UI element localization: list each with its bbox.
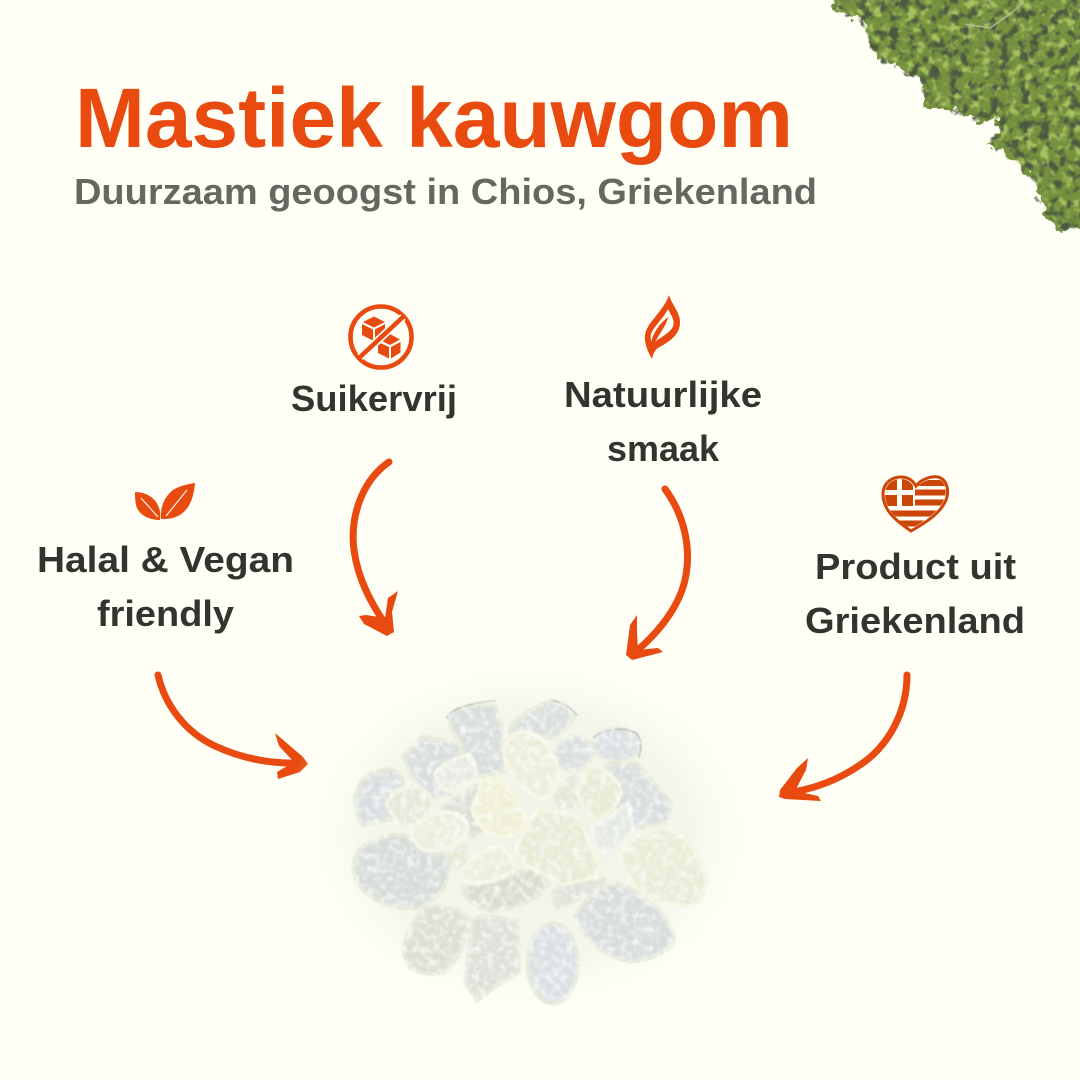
arrow: Griekenland to gum	[779, 675, 907, 801]
label: Halal & Vegan	[37, 539, 294, 580]
feature: Suikervrij	[291, 306, 457, 419]
arrow: Natuurlijke smaak to gum	[626, 489, 688, 660]
subtitle: Duurzaam geoogst in Chios, Griekenland	[74, 171, 817, 212]
icon: flame leaf	[645, 295, 680, 359]
feature: Product uit Griekenland	[805, 477, 1025, 641]
icon: Greek flag heart	[883, 477, 948, 531]
label: Suikervrij	[291, 378, 457, 419]
title: Mastiek kauwgom	[75, 71, 793, 165]
label: Product uit	[815, 546, 1016, 587]
arrow: Suikervrij to gum	[353, 462, 398, 636]
mastic gum pieces	[354, 700, 706, 1003]
feature: Halal & Vegan	[37, 483, 294, 634]
icon: two leaves	[135, 483, 195, 520]
tree foliage	[833, 0, 1080, 233]
feature: Natuurlijke smaak	[564, 295, 762, 469]
icon: no sugar cubes	[350, 306, 412, 368]
label line 2: friendly	[97, 593, 234, 634]
soft glow behind gum	[280, 640, 780, 1030]
label line 2: Griekenland	[805, 600, 1025, 641]
arrow: Halal and Vegan to gum	[158, 675, 308, 779]
label: Natuurlijke	[564, 374, 762, 415]
label line 2: smaak	[607, 428, 720, 469]
